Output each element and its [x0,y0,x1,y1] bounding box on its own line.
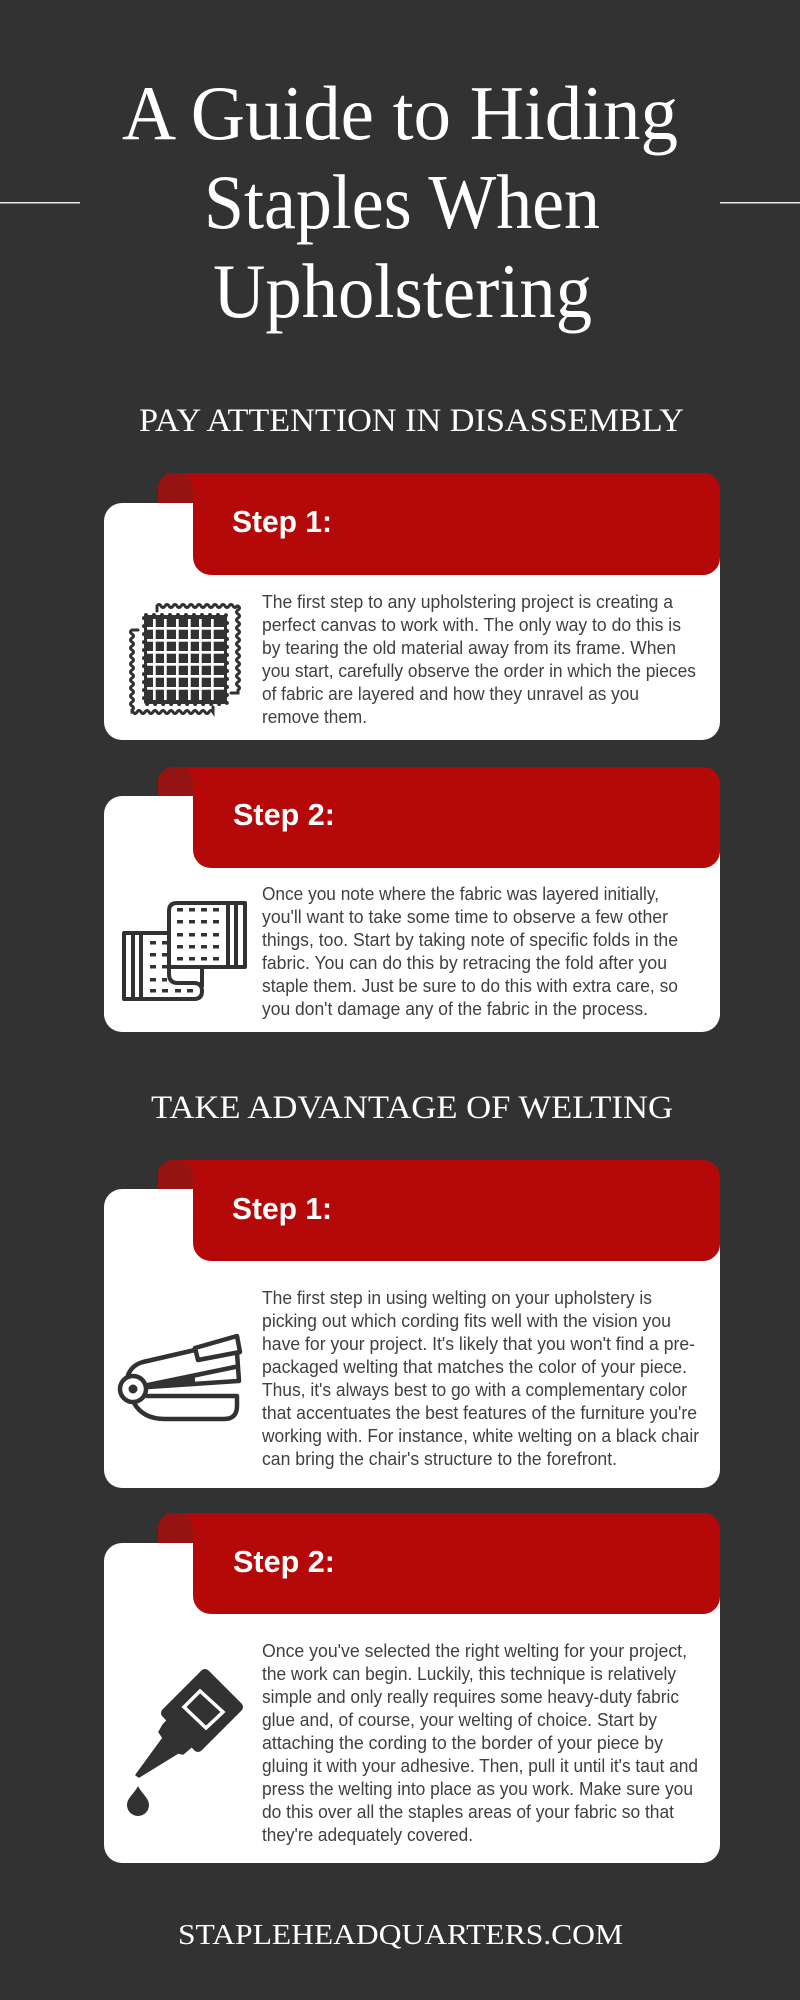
body text: Thus, it's always best to go with a complementary color [262,1380,687,1400]
body text: perfect canvas to work with. The only way to do this is [262,615,681,635]
title [122,70,678,334]
body text: Once you've selected the right welting for your project, [262,1641,687,1661]
step banner [158,1160,720,1261]
footer: website: STAPLEHEADQUARTERS.COM [178,1919,623,1951]
card background [104,1189,720,1488]
step banner [158,767,720,868]
body text: packaged welting that matches the color of your piece. [262,1357,687,1377]
body text: staple them. Just be sure to do this with extra care, so [262,976,678,996]
body text: gluing it with your adhesive. Then, pull it until it's taut and [262,1756,698,1776]
body text: the work can begin. Luckily, this technique is relatively [262,1664,676,1684]
title: Upholstering [213,248,592,334]
step banner [158,1513,720,1614]
panel: disassembly step 2 [104,767,720,1032]
body text [261,1288,699,1469]
icon: fabric swatches [130,604,240,714]
title: Staples When [204,159,600,245]
panel: welting step 2 [104,1513,720,1863]
icon: glue bottle [127,1674,238,1816]
body text [262,1641,698,1845]
body text: picking out which cording fits well with the vision you [262,1311,671,1331]
body text: working with. For instance, white welting on a black chair [261,1426,699,1446]
step banner [158,473,720,575]
body text: fabric. You can do this by retracing the fold after you [262,953,667,973]
body text [262,884,678,1019]
body text: you start, carefully observe the order in which the pieces [262,661,696,681]
body text: you'll want to take some time to observe a few other [262,907,668,927]
body text: have for your project. It's likely that you won't find a pre- [262,1334,695,1354]
body text: can bring the chair's structure to the forefront. [262,1449,617,1469]
body text: The first step in using welting on your upholstery is [262,1288,652,1308]
body text [262,592,696,727]
body text: you don't damage any of the fabric in the process. [262,999,648,1019]
body text: things, too. Start by taking note of specific folds in the [262,930,678,950]
body text: press the welting into place as you work. Make sure you [262,1779,693,1799]
body text: remove them. [262,707,367,727]
body text: The first step to any upholstering project is creating a [262,592,674,612]
card background [104,503,720,740]
body text: Once you note where the fabric was layered initially, [262,884,659,904]
icon: staple remover [120,1336,240,1419]
title: A Guide to Hiding [122,70,678,156]
body text: attaching the cording to the border of your piece by [262,1733,663,1753]
panel: disassembly step 1 [104,473,720,740]
body text: that accentuates the best features of the furniture you're [262,1403,697,1423]
card background [104,1543,720,1863]
body text: of fabric are layered and how they unravel as you [262,684,639,704]
heading: pay attention in disassembly: PAY ATTENTION IN DISASSEMBLY [139,403,684,439]
body text: simple and only really requires some heavy-duty fabric [262,1687,679,1707]
body text: glue and, of course, your welting of choice. Start by [262,1710,657,1730]
step banner: Step 2: [233,797,335,832]
step banner: Step 1: [232,1191,332,1226]
step banner: Step 2: [233,1544,335,1579]
step banner: Step 1: [232,504,332,539]
icon: folded fabric [124,903,245,999]
panel: welting step 1 [104,1160,720,1488]
card background [104,796,720,1032]
body text: they're adequately covered. [262,1825,473,1845]
body text: by tearing the old material away from its frame. When [262,638,676,658]
heading: take advantage of welting: TAKE ADVANTAGE OF WELTING [151,1090,673,1126]
body text: do this over all the staples areas of your fabric so that [262,1802,674,1822]
